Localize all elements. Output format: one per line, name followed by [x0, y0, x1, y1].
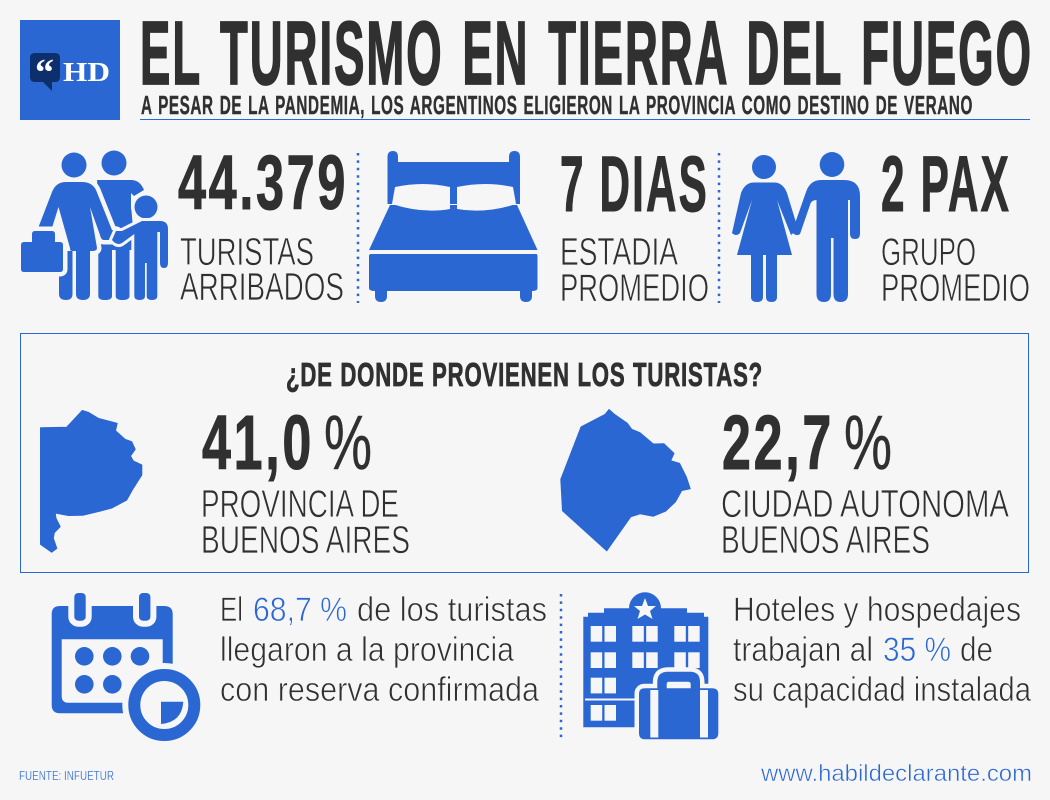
label: provincia de buenos aires: BUENOS AIRES [201, 519, 410, 562]
heading: origin: ¿DE DONDE PROVIENEN LOS TURISTAS? [286, 356, 763, 393]
logo: HD: HD [63, 57, 110, 87]
text: reservation: de los turistas [357, 591, 547, 629]
panel: origin of tourists [20, 334, 1028, 572]
label: turistas arribados [180, 231, 344, 309]
stat: 22,7 %: % [844, 400, 892, 486]
label: turistas arribados: ARRIBADOS [180, 266, 344, 309]
label: grupo promedio [881, 231, 1030, 310]
source note: FUENTE: INFUETUR [19, 769, 114, 783]
text: hotel capacity [733, 591, 1031, 709]
map: ciudad autonoma [561, 410, 690, 551]
label: provincia de buenos aires: PROVINCIA DE [201, 483, 399, 526]
text: reservation: con reserva confirmada [220, 671, 539, 709]
stat: 22,7 %: 22,7 [722, 400, 834, 486]
label: ciudad autonoma buenos aires [721, 483, 1009, 562]
map: provincia de buenos aires [40, 410, 142, 552]
stat: 41,0 %: % [324, 400, 372, 486]
text: reservation: El [220, 591, 243, 629]
text: reservation [220, 591, 547, 709]
text: hotel capacity: Hoteles y hospedajes [733, 591, 1021, 629]
icon: bed [369, 151, 538, 302]
icon: family [21, 150, 168, 300]
text: hotel capacity: 35 % [883, 631, 951, 669]
website: www.habildeclarante.com [760, 760, 1032, 786]
logo: HD: “ [35, 52, 54, 94]
label: turistas arribados: TURISTAS [180, 231, 314, 274]
label: estadia promedio: PROMEDIO [560, 267, 709, 310]
stat: 41,0 %: 41,0 [202, 400, 314, 486]
logo: HD [20, 20, 120, 120]
stat: 7 dias: 7 DIAS [560, 139, 709, 228]
label: ciudad autonoma buenos aires: BUENOS AIRES [721, 519, 930, 562]
text: hotel capacity: de [960, 631, 993, 669]
icon: hotel [583, 592, 718, 739]
text: hotel capacity: trabajan al [733, 631, 873, 669]
label: estadia promedio: ESTADIA [560, 231, 678, 274]
text: reservation: 68,7 % [253, 591, 347, 629]
label: grupo promedio: GRUPO [881, 231, 976, 274]
stat: 44.379: 44.379 [178, 140, 348, 226]
icon: couple [732, 152, 860, 302]
icon: calendar [52, 593, 206, 747]
label: estadia promedio [560, 231, 709, 310]
label: provincia de buenos aires [201, 483, 410, 562]
text: reservation: llegaron a la provincia [220, 631, 514, 669]
